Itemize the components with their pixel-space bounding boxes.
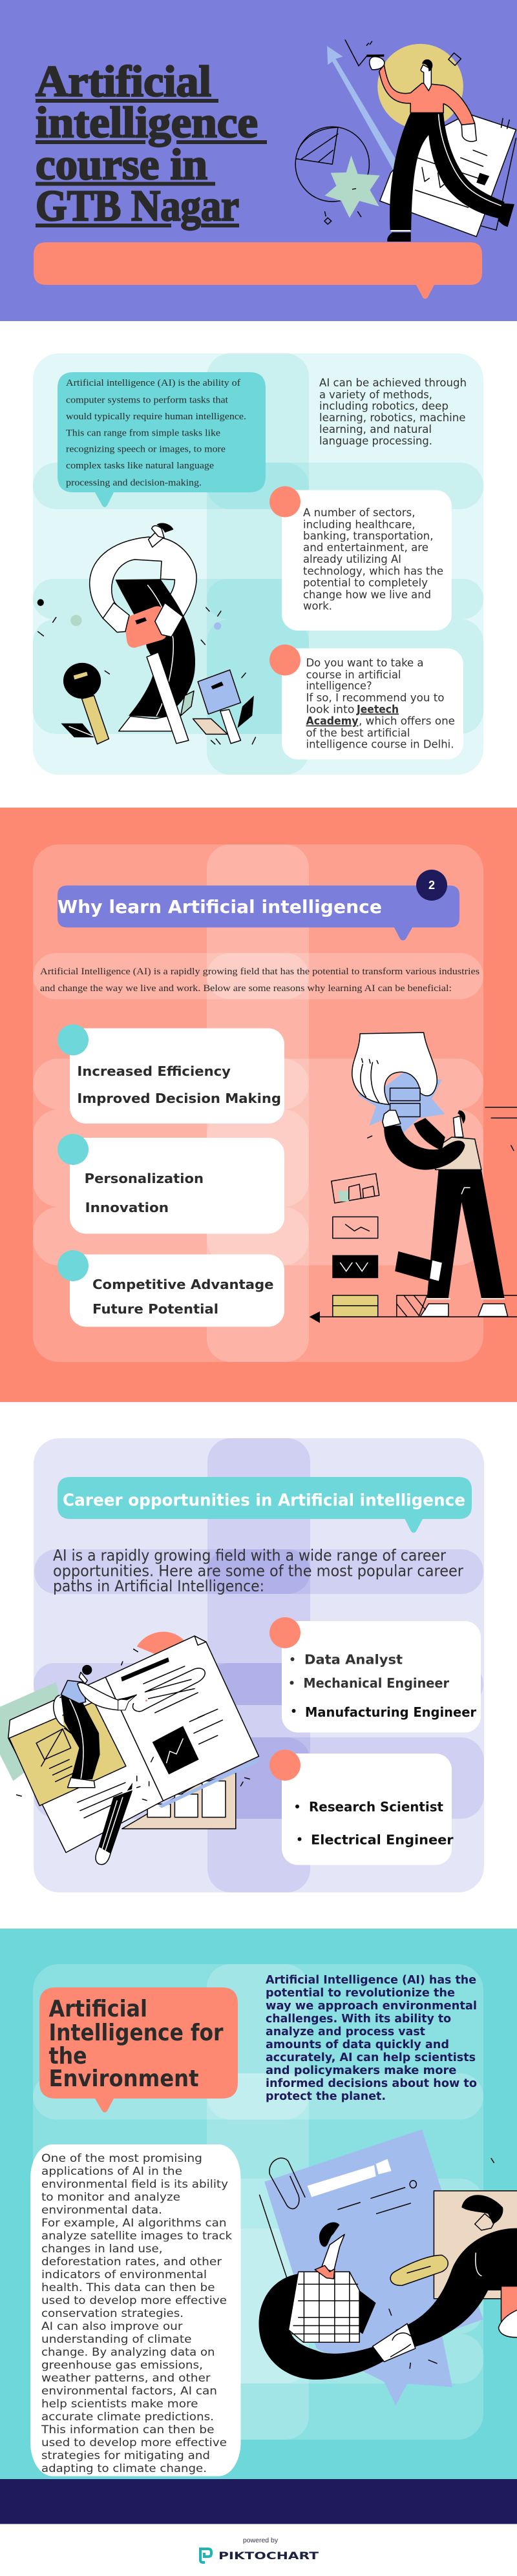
card: applications text: used to develop more effective: [41, 2294, 227, 2307]
card: advantage and potential: Future Potential: [92, 1301, 218, 1317]
text: AI potential summary: analyze and process vast: [266, 2025, 425, 2038]
card: applications text: used to develop more effective: [41, 2436, 227, 2449]
card: recommendation: course in artificial: [306, 669, 401, 682]
card: sectors: work.: [303, 600, 332, 613]
card: recommendation: Academy: [306, 715, 358, 728]
card: recommendation: Do you want to take a: [306, 657, 424, 670]
card: applications text: greenhouse gas emissions,: [41, 2359, 203, 2372]
card: applications text: help scientists make more: [41, 2398, 198, 2411]
card: applications text: health. This data can then be: [41, 2281, 215, 2294]
card: career list two: Research Scientist: [309, 1799, 443, 1814]
speech bubble: heading: [58, 885, 459, 941]
card: career list one: [269, 1617, 481, 1733]
intro paragraph: paths in Artificial Intelligence:: [53, 1577, 264, 1595]
card: applications text: to monitor and analyze: [41, 2191, 180, 2204]
card: career list one: Data Analyst: [304, 1651, 403, 1667]
text: methods: learning, robotics, machine: [319, 412, 465, 424]
illustration: man with tablet and signs: [37, 523, 255, 744]
card: applications text: adapting to climate change.: [41, 2462, 207, 2475]
speech bubble: definition: processing and decision-making.: [66, 478, 202, 488]
illustration: man reviewing document: [0, 1632, 259, 1865]
card: applications text: AI can also improve our: [41, 2320, 182, 2333]
speech bubble: definition: recognizing speech or images, to more: [66, 445, 226, 455]
card: recommendation: [269, 645, 463, 760]
footer: powered by Piktochart: powered by: [243, 2537, 279, 2544]
section: career opportunities: [0, 1438, 484, 1892]
card: applications text: environmental factors, AI can: [41, 2385, 217, 2398]
card: applications text: environmental field is its ability: [41, 2178, 228, 2191]
card: career list two: [269, 1750, 454, 1865]
number badge: [416, 870, 447, 901]
text: methods: language processing.: [319, 435, 432, 448]
speech bubble: definition: Artificial intelligence (AI) is the ability of: [66, 378, 240, 388]
speech bubble: heading: [39, 1987, 238, 2113]
text: AI potential summary: and policymakers make more: [266, 2064, 456, 2077]
card: recommendation: Jeetech: [356, 703, 399, 716]
card: recommendation: intelligence course in Delhi.: [306, 738, 454, 751]
card: sectors: change how we live and: [303, 589, 431, 602]
card: applications text: [30, 2144, 240, 2476]
text: AI potential summary: amounts of data quickly and: [266, 2038, 449, 2051]
text: methods: learning, and natural: [319, 423, 432, 436]
card: applications text: accurate climate predictions.: [41, 2411, 214, 2424]
illustration: man and giant hand stacking blocks: [310, 1032, 517, 1323]
speech bubble: definition: [58, 372, 266, 507]
card: recommendation: of the best artificial: [306, 727, 410, 740]
panel background: [33, 844, 483, 1362]
title: course in: [36, 140, 207, 189]
card: personalization and innovation: [58, 1134, 284, 1234]
footer: powered by Piktochart: [200, 2537, 319, 2562]
section: AI for the environment: [0, 1929, 517, 2479]
text: AI potential summary: informed decisions about how to: [266, 2077, 477, 2090]
card: sectors: technology, which has the: [303, 565, 443, 578]
text: AI potential summary: potential to revolutionize the: [266, 1986, 455, 2000]
speech bubble: heading: Environment: [49, 2066, 199, 2092]
intro paragraph: and change the way we live and work. Below are some reasons why learning AI can be beneficial:: [40, 983, 452, 994]
card: efficiency and decisions: [58, 1025, 284, 1124]
footer: powered by Piktochart: PIKTOCHART: [218, 2550, 319, 2562]
intro paragraph: [40, 967, 480, 994]
speech bubble: heading: Why learn Artificial intelligence: [58, 896, 382, 917]
card: applications text: understanding of climate: [41, 2333, 191, 2346]
speech bubble: definition: computer systems to perform tasks that: [66, 395, 229, 406]
section: introduction: [33, 353, 483, 775]
speech bubble: definition: would typically require human intelligence.: [66, 412, 246, 422]
intro paragraph: AI is a rapidly growing field with a wide range of career: [53, 1547, 446, 1565]
card: applications text: This information can then be: [41, 2424, 214, 2436]
text: methods: [319, 377, 467, 448]
footer band: [0, 2479, 517, 2524]
speech bubble: heading: Artificial: [49, 1996, 147, 2022]
text: AI potential summary: accurately, AI can help scientists: [266, 2051, 476, 2064]
text: AI potential summary: protect the planet.: [266, 2089, 386, 2103]
text: AI potential summary: [266, 1973, 477, 2103]
card: sectors: [269, 486, 452, 631]
card: applications text: For example, AI algorithms can: [41, 2217, 226, 2230]
card: sectors: A number of sectors,: [303, 507, 415, 519]
illustration: handshake: [259, 2130, 517, 2405]
speech bubble: definition: complex tasks like natural language: [66, 461, 214, 471]
speech bubble: heading: the: [49, 2043, 87, 2069]
panel background: [33, 1964, 483, 2440]
card: applications text: strategies for mitigating and: [41, 2449, 210, 2462]
card: efficiency and decisions: Increased Efficiency: [77, 1063, 231, 1079]
card: applications text: analyze satellite images to track: [41, 2230, 232, 2243]
card: sectors: banking, transportation,: [303, 530, 433, 543]
text: AI potential summary: way we approach environmental: [266, 1999, 477, 2013]
card: applications text: One of the most promising: [41, 2152, 202, 2165]
card: applications text: deforestation rates, and other: [41, 2256, 222, 2268]
title: Artificial: [36, 57, 211, 106]
text: methods: including robotics, deep: [319, 400, 448, 413]
card: advantage and potential: [58, 1250, 284, 1327]
text: AI potential summary: Artificial Intelligence (AI) has the: [266, 1973, 476, 1987]
card: applications text: conservation strategies.: [41, 2307, 184, 2320]
title: [36, 57, 267, 230]
card: applications text: applications of AI in the: [41, 2165, 182, 2178]
speech bubble: definition: This can range from simple tasks like: [66, 428, 220, 439]
section: hero: [0, 0, 517, 321]
card: advantage and potential: Competitive Advantage: [92, 1277, 274, 1292]
panel background: [33, 353, 483, 775]
text: AI potential summary: challenges. With its ability to: [266, 2012, 451, 2026]
text: methods: a variety of methods,: [319, 388, 432, 401]
card: career list two: Electrical Engineer: [311, 1832, 454, 1848]
card: personalization and innovation: Personalization: [85, 1171, 204, 1186]
number badge: 2: [428, 879, 435, 892]
card: applications text: weather patterns, and other: [41, 2372, 211, 2385]
illustration: man drawing on chart: [295, 40, 516, 242]
title: intelligence: [36, 98, 258, 147]
speech bubble: heading: Intelligence for: [49, 2020, 224, 2046]
speech bubble: heading: [58, 1477, 472, 1533]
section: why learn AI: [0, 808, 517, 1402]
card: sectors: potential to completely: [303, 577, 428, 590]
card: applications text: changes in land use,: [41, 2243, 163, 2256]
card: applications text: environmental data.: [41, 2204, 162, 2217]
title: GTB Nagar: [36, 181, 239, 230]
intro paragraph: Artificial Intelligence (AI) is a rapidly growing field that has the potential to transform various industries: [40, 967, 480, 977]
card: sectors: already utilizing AI: [303, 553, 401, 566]
card: recommendation: intelligence?: [306, 680, 372, 693]
card: recommendation: If so, I recommend you to: [306, 692, 445, 705]
speech bubble: heading: Career opportunities in Artificial intelligence: [63, 1491, 465, 1511]
panel background: [34, 1438, 484, 1892]
speech bubble: salmon bar: [34, 242, 482, 298]
card: efficiency and decisions: Improved Decision Making: [77, 1091, 281, 1106]
icon: Piktochart logo: [200, 2549, 211, 2562]
card: recommendation: , which offers one: [359, 715, 455, 728]
card: applications text: change. By analyzing data on: [41, 2346, 215, 2359]
card: sectors: and entertainment, are: [303, 541, 428, 554]
card: career list one: Mechanical Engineer: [303, 1675, 449, 1691]
card: sectors: including healthcare,: [303, 519, 415, 532]
card: personalization and innovation: Innovation: [85, 1200, 169, 1215]
intro paragraph: [53, 1547, 463, 1595]
card: recommendation: look into: [306, 703, 354, 716]
text: methods: AI can be achieved through: [319, 377, 467, 390]
card: career list one: Manufacturing Engineer: [305, 1704, 476, 1720]
intro paragraph: opportunities. Here are some of the most popular career: [53, 1562, 463, 1580]
card: applications text: indicators of environmental: [41, 2268, 207, 2281]
